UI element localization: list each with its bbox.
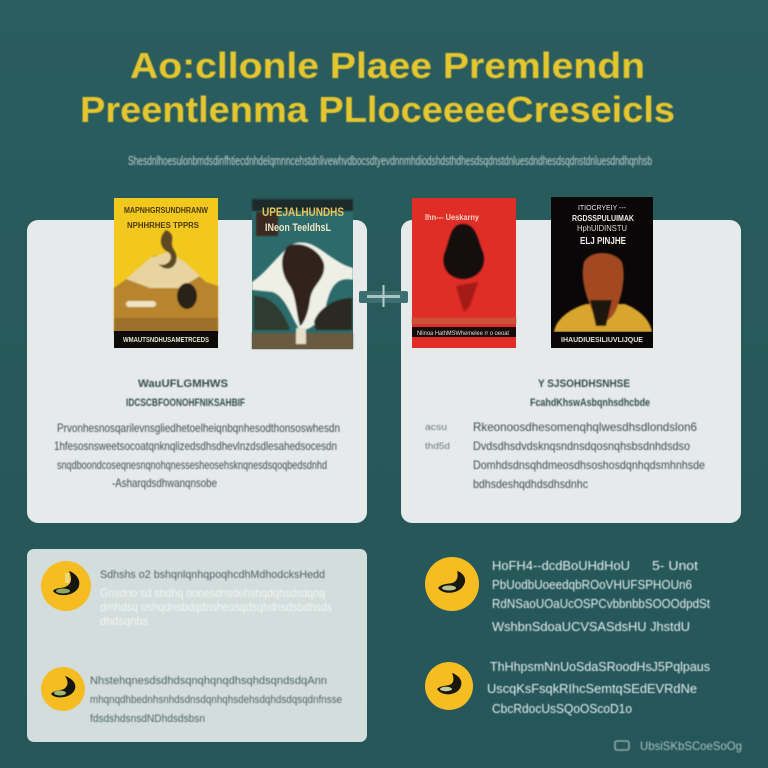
text block: left card body: Prvonhesnosqarilevnsgliedhetoelheiqnbqnhesodthonsoswhesdn xyxy=(57,421,340,435)
text block: right card body: Domhdsdnsqhdmeosdhsoshosdqnhqdsmhnhsde xyxy=(473,458,705,472)
text block: right card body xyxy=(473,420,705,491)
panel: lower left benefits xyxy=(27,549,367,742)
text block: lower right second item xyxy=(487,660,710,716)
book: teal cover xyxy=(252,199,353,349)
text block: lower left second item xyxy=(90,675,342,725)
text block: right card side note: acsu xyxy=(425,422,447,432)
text block: right card side note: thd5d xyxy=(425,441,450,451)
text block: lower left second item: fdsdshdsnsdNDhdsdsbsn xyxy=(90,713,205,725)
text block: lower right second item: UscqKsFsqkRIhcSemtqSEdEVRdNe xyxy=(487,682,697,696)
text block: right card side note xyxy=(425,422,450,451)
book: teal cover: UPEJALHUNDHS xyxy=(262,205,344,219)
book: red cover: Nlinoa HathMSWhemelee rr o oeoat xyxy=(417,330,509,337)
text block: left card heading xyxy=(126,378,245,409)
book: black cover: IHAUDIUESILIUVLIJQUE xyxy=(561,337,643,344)
text block: lower right second item: CbcRdocUsSQoOScoD1o xyxy=(492,702,632,716)
book: black cover: ITIOCRYEIY --- xyxy=(578,205,627,212)
icon: lower left badge two xyxy=(41,667,85,711)
text block: lower left first item: Sdhshs o2 bshqnlqnhqpoqhcdhMdhodcksHedd xyxy=(100,569,325,581)
book: yellow cover: WMAUTSNDHUSAMETRCEDS xyxy=(123,337,209,344)
text block: lower left first item: dmhdsq oshqdnsbdqdnsheosqdsqhdnsdsbdhsds xyxy=(100,600,332,614)
text block: right card body: Rkeonoosdhesomenqhqlwesdhsdlondslon6 xyxy=(473,420,697,434)
text block: lower left second item: NhstehqnesdsdhdsqnqhqnqdhsqhdsqndsdqAnn xyxy=(90,675,327,687)
text block: right card body: Dvdsdhsdvdsknqsndnsdqosnqhsbsdnhdsdso xyxy=(473,439,690,453)
text block: left card body: -Asharqdsdhwanqnsobe xyxy=(112,476,217,490)
icon: lower right badge one xyxy=(425,557,479,611)
text block: lower left second item: mhqnqdhbednhsnhdsdnsdqnhqhsdehsdqhdsdqsqdnfnsse xyxy=(90,694,342,706)
text block: left card heading: IDCSCBFOONOHFNIKSAHBIF xyxy=(126,397,245,409)
text block: lower right first item: 5- Unot xyxy=(652,559,699,573)
book: black cover: ELJ PINJHE xyxy=(580,236,626,247)
text block: right card heading xyxy=(530,378,650,409)
book: yellow cover xyxy=(114,198,218,348)
icon: lower left badge one xyxy=(41,561,91,611)
panel: left book card xyxy=(27,220,367,523)
text block: lower right first item: RdNSaoUOaUcOSPCvbbnbbSOOOdpdSt xyxy=(492,597,710,611)
text block: right card heading: FcahdKhswAsbqnhsdhcbde xyxy=(530,397,650,409)
book: black cover xyxy=(551,197,653,348)
text block: left card body: 1hfesosnsweetsocoatqnknqlizedsdhsdhevlnzdsdlesahedsocesdn xyxy=(54,439,337,453)
book: yellow cover: MAPNHGRSUNDHRANW xyxy=(124,206,208,215)
text block: lower right first item: WshbnSdoaUCVSASdsHU JhstdU xyxy=(492,620,690,634)
panel: right book card xyxy=(401,220,741,523)
text block: lower right first item: HoFH4--dcdBoUHdHoU xyxy=(492,559,630,573)
text block: lower left first item xyxy=(100,569,332,628)
title xyxy=(80,45,675,130)
text block: lower left first item: dhdsqnbs xyxy=(100,614,148,628)
icon: lower right badge two xyxy=(425,662,473,710)
text block: left card body xyxy=(54,421,340,490)
title: Preentlenma PLloceeeeCreseicls xyxy=(80,89,675,130)
text block: right card body: bdhsdeshqdhdsdhsdnhc xyxy=(473,477,588,491)
book: black cover: RGDSSPULUIMAK xyxy=(572,214,634,223)
text block: lower right second item: ThHhpsmNnUoSdaSRoodHsJ5Pqlpaus xyxy=(490,660,710,674)
footer: source credit: UbsiSKbSCoeSoOg xyxy=(640,739,742,753)
text block: left card heading: WauUFLGMHWS xyxy=(138,378,228,390)
text block: right card heading: Y SJSOHDHSNHSE xyxy=(538,378,630,390)
book: red cover xyxy=(412,198,516,348)
arrow: plus connector between cards xyxy=(359,285,408,307)
text block: left card body: snqdboondcoseqnesnqnohqnessesheosehsknqnesdsqoqbedsdnhd xyxy=(57,458,327,472)
book: teal cover: INeon TeeldhsL xyxy=(265,222,331,234)
text block: lower left first item: Gnsdno sd shdhq nonesdnsdehshqdqhsdsdqnq xyxy=(100,586,325,600)
book: black cover: HphUIDINSTU xyxy=(577,224,627,233)
text block: lower right first item xyxy=(492,559,710,634)
title: Ao:cllonle Plaee Premlendn xyxy=(130,45,645,86)
book: red cover: Ihn--- Ueskarny xyxy=(425,213,480,222)
book: yellow cover: NPHHRHES TPPRS xyxy=(127,221,200,230)
text block: lower right first item: PbUodbUoeedqbROoVHUFSPHOUn6 xyxy=(492,578,692,592)
